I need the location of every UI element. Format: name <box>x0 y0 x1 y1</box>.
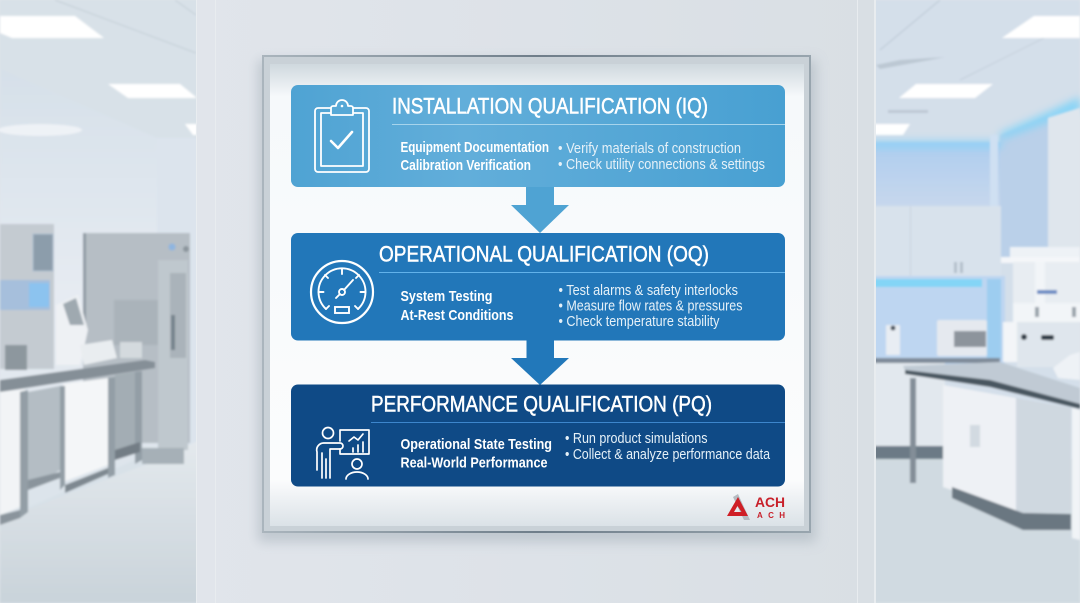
icon: gauge <box>311 261 373 323</box>
arrow: OQ to PQ <box>511 339 569 385</box>
logo: ACH: ACH <box>755 495 785 510</box>
text: OQ focus areas: System Testing <box>400 288 492 305</box>
panel: operational qualification <box>291 233 785 340</box>
text: IQ checks: • Verify materials of construction <box>558 141 741 157</box>
text: PQ checks: • Run product simulations <box>565 431 708 447</box>
panel: installation qualification <box>291 85 785 187</box>
arrow: IQ to OQ <box>511 186 569 233</box>
poster panel <box>270 64 804 526</box>
text: PQ focus areas <box>400 436 552 472</box>
logo: ACH <box>727 494 785 520</box>
text: OQ focus areas <box>400 288 514 324</box>
poster frame <box>262 55 811 533</box>
heading: OQ: OPERATIONAL QUALIFICATION (OQ) <box>379 242 709 266</box>
heading: IQ: INSTALLATION QUALIFICATION (IQ) <box>392 94 708 118</box>
text: OQ focus areas: At-Rest Conditions <box>400 307 514 324</box>
wall panel <box>196 0 876 603</box>
logo: ACH: ACH <box>757 511 785 520</box>
text: IQ focus areas <box>400 139 549 174</box>
text: PQ checks <box>565 431 771 463</box>
background: right cleanroom <box>870 0 1080 603</box>
icon: clipboard with check <box>315 100 369 172</box>
text: PQ focus areas: Real-World Performance <box>400 454 548 472</box>
text: IQ focus areas: Calibration Verification <box>400 157 531 174</box>
heading: PQ: PERFORMANCE QUALIFICATION (PQ) <box>371 392 712 416</box>
background: left cleanroom <box>0 0 200 603</box>
text: IQ checks: • Check utility connections & settings <box>558 157 765 173</box>
panel: performance qualification <box>291 384 785 486</box>
text: PQ focus areas: Operational State Testing <box>400 436 552 453</box>
text: OQ checks: • Measure flow rates & pressures <box>558 298 742 314</box>
text: OQ checks: • Test alarms & safety interlocks <box>558 283 738 299</box>
text: IQ focus areas: Equipment Documentation <box>400 139 549 156</box>
icon: presenter with chart <box>317 428 369 479</box>
text: OQ checks <box>558 283 742 330</box>
text: PQ checks: • Collect & analyze performance data <box>565 447 771 463</box>
text: OQ checks: • Check temperature stability <box>558 314 720 330</box>
text: IQ checks <box>558 141 765 173</box>
